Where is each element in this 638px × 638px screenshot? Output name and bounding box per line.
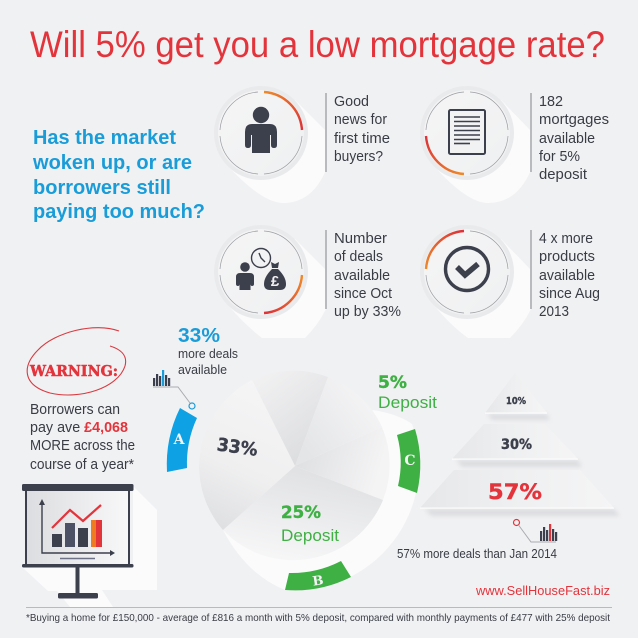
callout: 33% more deals: more deals (178, 347, 238, 361)
text: number of deals: up by 33% (334, 303, 401, 320)
text: number of deals: of deals (334, 248, 383, 265)
warning text: pay ave £4,068 (30, 419, 128, 436)
text: 182 mortgages: available (539, 130, 595, 147)
pyramid tier: 57% (420, 470, 614, 509)
panel: number of deals (214, 225, 401, 338)
pie label: 33%: 33% (215, 434, 259, 461)
website link: www.SellHouseFast.biz (475, 583, 610, 598)
pie label: 25% deposit: Deposit (281, 526, 339, 545)
text: 4 x more products: since Aug (539, 285, 600, 302)
text: number of deals: Number (334, 230, 387, 247)
warning text: course of a year* (30, 456, 134, 473)
text: good news: first time (334, 130, 390, 147)
callout: 57% more deals: 57% more deals than Jan 2014 (397, 547, 557, 561)
icon ring: clock, person, money bag (214, 225, 308, 319)
text: 4 x more products: 2013 (539, 303, 569, 320)
long shadow (227, 239, 326, 338)
pie slices (252, 371, 328, 466)
text: 4 x more products: 4 x more (539, 230, 593, 247)
chart line (52, 505, 101, 528)
pyramid tier: 30%: 30% (501, 437, 532, 453)
title: Will 5% get you a low mortgage rate? (30, 24, 605, 65)
tab B: B (312, 573, 325, 590)
divider (325, 230, 327, 309)
footnote: *Buying a home for £150,000 - average of £816 a month with 5% deposit, compared with monthly payments of £477 with 25% deposit (26, 612, 610, 624)
warning badge (27, 328, 126, 395)
text: 4 x more products: available (539, 267, 595, 284)
pie chart (199, 371, 419, 590)
pyramid tier: 30% (452, 424, 578, 460)
callout: 33% more deals: available (178, 363, 227, 377)
subheading: Has the market (33, 127, 176, 149)
callout: 57% more deals (397, 520, 557, 561)
pyramid tier: 57%: 57% (488, 480, 542, 504)
long shadow (22, 486, 157, 607)
text: 4 x more products (539, 230, 600, 320)
text: 182 mortgages: for 5% (539, 148, 580, 165)
warning badge: WARNING: (29, 362, 118, 380)
text: number of deals: since Oct (334, 285, 393, 302)
text: good news: Good (334, 93, 369, 110)
white long shadow ring (223, 410, 419, 590)
text: number of deals (334, 230, 401, 320)
tab A: A (173, 432, 186, 448)
pie label: 25% deposit: 25% (281, 503, 321, 523)
divider (530, 93, 532, 172)
long shadow (227, 100, 326, 203)
pyramid tier: 10%: 10% (506, 396, 526, 407)
subheading (32, 127, 205, 223)
pyramid tier: 10% (485, 373, 547, 414)
callout: 5% deposit: 5% (378, 373, 407, 393)
panel: first time buyers (214, 86, 390, 203)
presentation board (22, 484, 157, 607)
tab C: C (404, 453, 416, 469)
subheading: borrowers still (33, 177, 171, 199)
warning text (30, 401, 135, 473)
tab C (397, 429, 420, 493)
tab A (167, 408, 197, 472)
subheading: woken up, or are (32, 152, 192, 174)
callout: 33% more deals: 33% (178, 325, 220, 347)
divider (530, 230, 532, 309)
callout: 33% more deals (153, 325, 238, 409)
warning text: Borrowers can (30, 401, 120, 418)
long shadow (433, 100, 531, 203)
tab B (285, 561, 351, 590)
footer rule (26, 607, 612, 608)
icon ring: clock, person, money bag: £ (271, 273, 280, 290)
text: good news (334, 93, 390, 165)
icon ring: check mark (420, 225, 514, 319)
text: 182 mortgages: deposit (539, 166, 588, 183)
divider (325, 93, 327, 172)
pyramid (420, 373, 620, 516)
long shadow (433, 239, 531, 338)
icon ring: person (214, 86, 308, 180)
pyramid shadows (424, 414, 620, 516)
mini bars icon (153, 370, 170, 386)
subheading: paying too much? (33, 201, 205, 223)
panel: 182 mortgages (420, 86, 609, 203)
pie label: 25% deposit (281, 503, 339, 545)
screen (26, 490, 129, 566)
text: number of deals: available (334, 267, 390, 284)
warning text: MORE across the (30, 437, 135, 454)
text: good news: news for (334, 111, 387, 128)
callout: 5% deposit: Deposit (378, 393, 437, 412)
text: good news: buyers? (334, 148, 383, 165)
icon ring: document (420, 86, 514, 180)
text: 182 mortgages: 182 (539, 93, 563, 110)
text: 182 mortgages (539, 93, 609, 183)
panel: 4 x more products (420, 225, 600, 338)
chart bars (52, 534, 62, 547)
text: 4 x more products: products (539, 248, 595, 265)
callout: 5% deposit (378, 373, 437, 412)
chart axes (42, 502, 112, 553)
text: 182 mortgages: mortgages (539, 111, 609, 128)
mini bars icon (540, 524, 557, 541)
